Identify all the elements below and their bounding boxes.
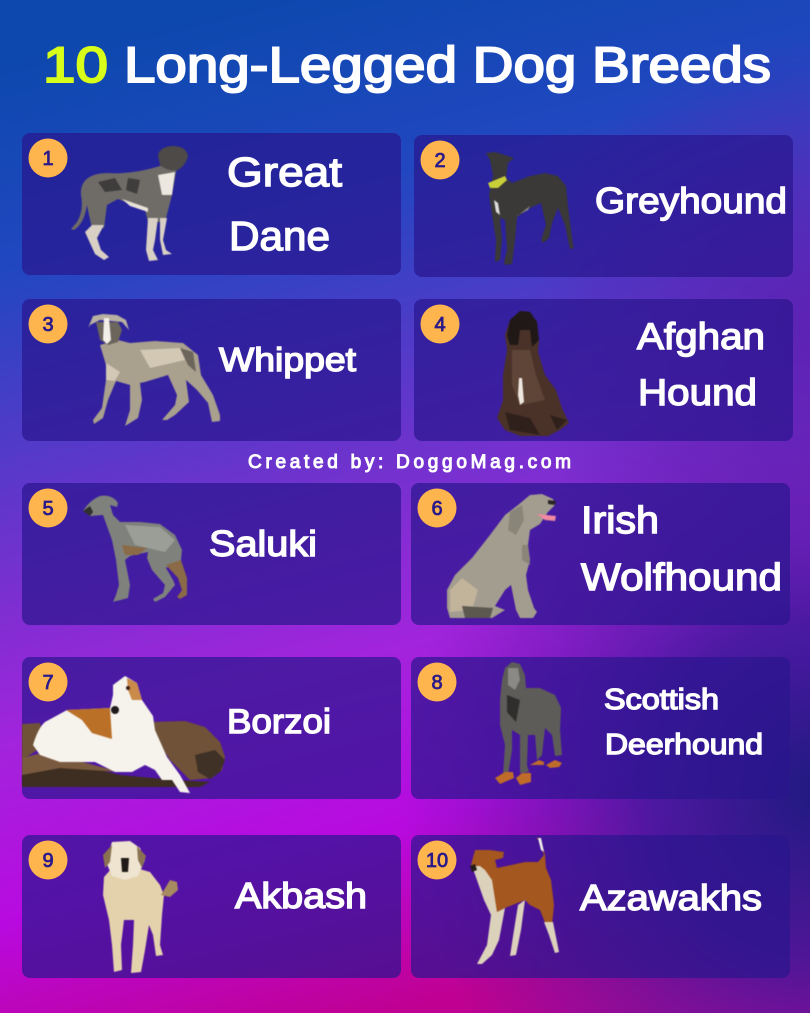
icon: Whippet dog [88, 314, 220, 426]
title: Long-Legged Dog Breeds [124, 37, 771, 93]
badge 10 [418, 840, 456, 880]
credit line: Created by: DoggoMag.com [248, 452, 571, 473]
icon: Scottish Deerhound dog [495, 662, 562, 785]
icon: Borzoi dog on sofa [22, 676, 225, 793]
panel: Scottish Deerhound [411, 657, 790, 799]
badge 6: 6 [431, 498, 443, 520]
badge 5 [28, 488, 68, 528]
badge 3: 3 [42, 314, 54, 336]
icon: Irish Wolfhound dog [447, 494, 556, 618]
panel: Akbash [22, 835, 401, 978]
badge 6 [418, 488, 456, 528]
panel: Greyhound [414, 135, 793, 277]
title: 10 [43, 37, 108, 93]
panel: Borzoi [22, 657, 401, 799]
label: Azawakhs: Azawakhs [580, 877, 762, 918]
badge 10: 10 [426, 850, 448, 872]
badge 3 [28, 304, 68, 344]
panel: Afghan Hound [414, 299, 793, 441]
label: Afghan Hound [637, 316, 765, 413]
label: Afghan Hound: Afghan [637, 316, 765, 357]
badge 2 [420, 140, 460, 180]
badge 8: 8 [431, 672, 443, 694]
badge 9: 9 [42, 850, 54, 872]
panel: Great Dane [22, 133, 401, 275]
panel: Azawakhs [411, 835, 790, 978]
icon: Greyhound dog [486, 152, 574, 265]
label: Great Dane: Great [227, 149, 343, 195]
label: Borzoi: Borzoi [227, 703, 331, 741]
icon: Saluki dog [83, 496, 187, 602]
icon: Azawakh dog [470, 838, 559, 964]
label: Scottish Deerhound: Scottish [604, 684, 719, 716]
label: Irish Wolfhound: Wolfhound [581, 557, 782, 599]
panel: Irish Wolfhound [411, 483, 790, 625]
badge 7: 7 [42, 672, 54, 694]
label: Whippet: Whippet [219, 341, 356, 378]
badge 2: 2 [434, 150, 446, 172]
label: Irish Wolfhound [581, 500, 782, 599]
badge 5: 5 [42, 498, 54, 520]
label: Scottish Deerhound: Deerhound [605, 729, 763, 761]
badge 4: 4 [434, 314, 446, 336]
label: Irish Wolfhound: Irish [581, 500, 659, 542]
icon: Akbash dog [103, 841, 178, 973]
label: Afghan Hound: Hound [638, 372, 757, 413]
badge 9 [28, 840, 68, 880]
badge 7 [28, 662, 68, 702]
badge 1: 1 [42, 148, 54, 170]
badge 1 [28, 138, 68, 178]
label: Scottish Deerhound [604, 684, 763, 761]
label: Great Dane [227, 149, 343, 259]
label: Greyhound: Greyhound [595, 180, 787, 221]
icon: Afghan Hound dog [497, 311, 569, 436]
panel: Whippet [22, 299, 401, 441]
label: Great Dane: Dane [229, 213, 330, 259]
panel: Saluki [22, 483, 401, 625]
badge 8 [418, 662, 456, 702]
icon: Great Dane dog [71, 146, 188, 261]
badge 4 [420, 304, 460, 344]
label: Saluki: Saluki [209, 523, 317, 564]
label: Akbash: Akbash [235, 875, 367, 916]
